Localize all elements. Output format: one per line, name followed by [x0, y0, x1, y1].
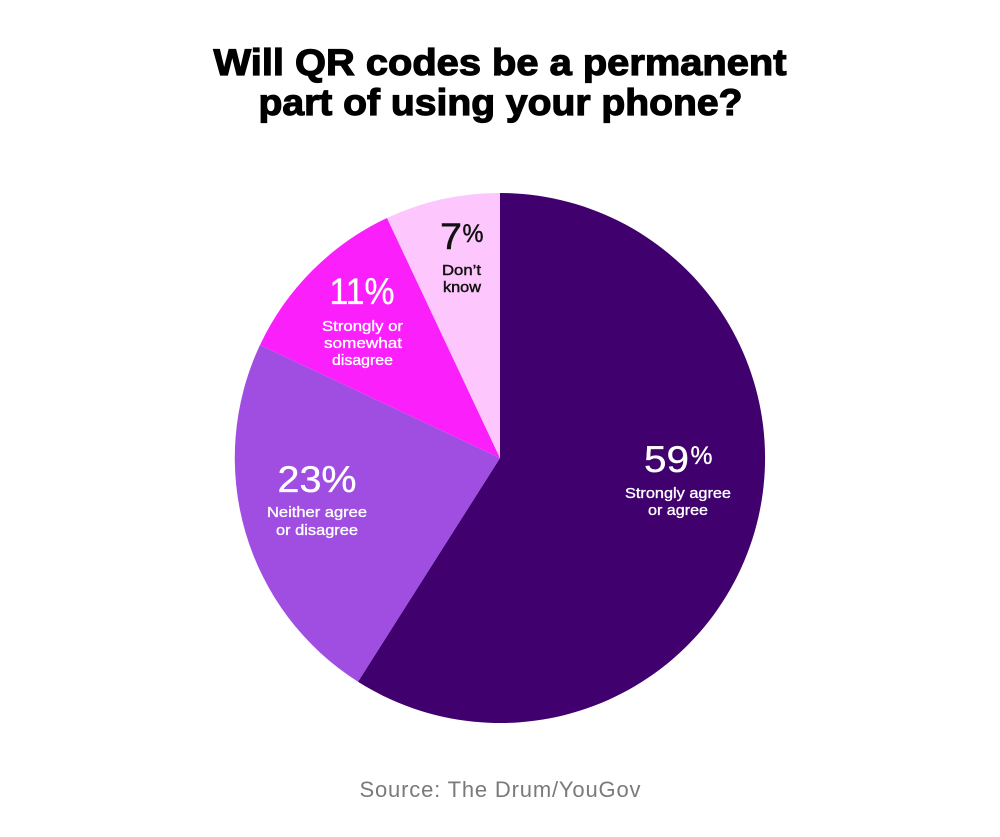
slice: strongly agree or agree 59%: 59 — [644, 439, 689, 480]
slice: don't know 7%: % — [462, 220, 484, 248]
slice: don't know 7%: Don’t — [442, 262, 482, 279]
slice: don't know 7%: 7 — [440, 216, 462, 257]
slice: strongly or somewhat disagree 11%: Strongly or — [322, 318, 403, 335]
slice: don't know 7% — [387, 193, 500, 458]
slice: strongly or somewhat disagree 11%: somewhat — [324, 335, 403, 352]
slice: neither agree or disagree 23%: Neither agree — [267, 504, 367, 521]
slice: neither agree or disagree 23%: 23% — [278, 459, 356, 500]
slice: neither agree or disagree 23% — [235, 345, 500, 682]
slice: strongly or somewhat disagree 11%: 11% — [330, 271, 394, 312]
slice: strongly agree or agree 59%: or agree — [648, 502, 708, 519]
slice: strongly agree or agree 59%: % — [690, 442, 712, 470]
slice: strongly or somewhat disagree 11%: disagree — [332, 352, 393, 369]
source note: Source: The Drum/YouGov — [360, 777, 640, 802]
title — [214, 42, 786, 123]
slice: strongly agree or agree 59% — [358, 193, 765, 723]
pie chart — [235, 193, 765, 723]
title: Will QR codes be a permanent — [214, 42, 786, 83]
slice: don't know 7%: know — [443, 279, 481, 296]
slice: strongly agree or agree 59%: Strongly agree — [625, 485, 731, 502]
title: part of using your phone? — [258, 82, 742, 123]
slice: neither agree or disagree 23%: or disagree — [276, 522, 358, 539]
slice: strongly or somewhat disagree 11% — [260, 218, 500, 458]
